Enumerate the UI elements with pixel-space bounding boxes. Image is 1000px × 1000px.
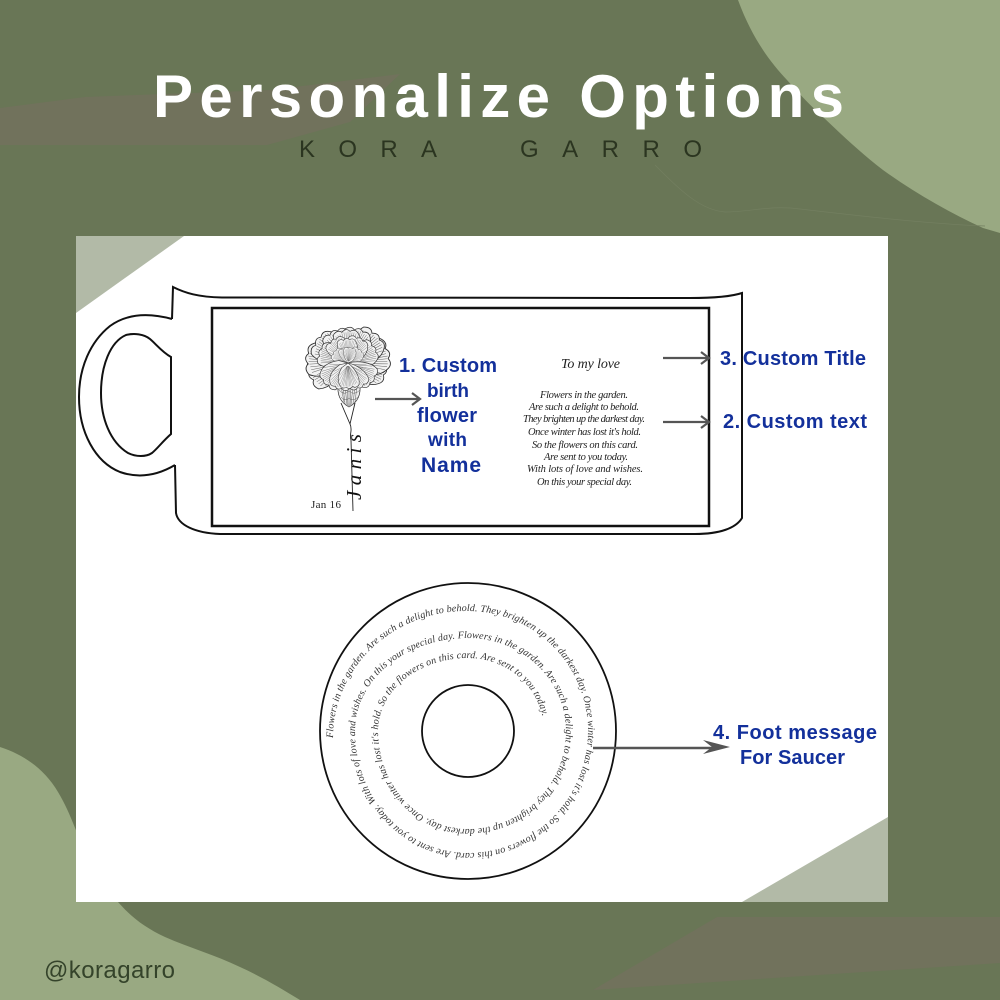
name on stem: Janis: [342, 434, 366, 500]
arrow: foot message: [593, 740, 730, 754]
custom poem text: Are sent to you today.: [543, 452, 628, 463]
thin contour line: [655, 165, 985, 226]
custom poem text: Are such a delight to behold.: [528, 402, 639, 413]
custom poem text: Flowers in the garden.: [539, 390, 628, 401]
spiral foot message: Flowers in the garden. Are such a delight to behold. They brighten up the darkest day. Once winter has lost it's hold. So the flowers on this card. Are sent to you today. With lots of love and wishes. On this your special day. Flowers in the garden. Are such a delight to behold. They brighten up the darkest day. Once winter has lost it's hold. So the flowers on this card. Are sent to you today.: [326, 604, 595, 860]
arrow: custom title: [663, 352, 709, 364]
wrap print area: [212, 308, 709, 526]
label: custom title: 3. Custom Title: [720, 348, 866, 370]
label: foot message: For Saucer: [740, 747, 845, 769]
flower stem: [341, 403, 355, 511]
mug outline: [79, 287, 742, 534]
brown shape bottom right: [593, 917, 1000, 990]
title: Personalize Options: [153, 63, 844, 130]
custom poem text: Once winter has lost it's hold.: [528, 427, 641, 438]
subtitle: KORA: [299, 136, 437, 163]
custom poem text: On this your special day.: [537, 477, 632, 488]
label: custom text: 2. Custom text: [723, 411, 867, 433]
light green shape top right: [738, 0, 1000, 233]
subtitle: GARRO: [520, 136, 702, 163]
label: custom birth flower: 1. Custom: [399, 355, 497, 377]
white panel: [76, 236, 888, 902]
corner triangle bottom right: [742, 817, 888, 902]
label: custom birth flower: flower: [417, 405, 477, 427]
label: foot message: [713, 722, 877, 769]
flower outer petals: [303, 323, 393, 391]
flower middle petals: [314, 333, 381, 375]
saucer outer rim: [320, 583, 616, 879]
mug handle inner: [101, 334, 171, 456]
label: custom birth flower: birth: [427, 381, 469, 402]
mug handle outer: [79, 315, 175, 476]
subtitle: [299, 136, 702, 163]
handle credit: @koragarro: [44, 957, 175, 984]
custom poem text: With lots of love and wishes.: [527, 464, 643, 475]
flower front petals: [316, 352, 381, 393]
icon: carnation birth flower: [303, 323, 393, 511]
arrow: custom text: [663, 416, 709, 428]
light green shape bottom left: [0, 747, 300, 1000]
birth date: Jan 16: [311, 499, 342, 511]
custom poem text: [523, 390, 645, 488]
flower calyx: [338, 383, 360, 407]
corner triangle top left: [76, 236, 184, 313]
saucer foot ring: [422, 685, 514, 777]
custom poem text: They brighten up the darkest day.: [523, 414, 645, 425]
saucer: [319, 582, 617, 880]
label: custom birth flower: Name: [421, 454, 481, 477]
label: foot message: 4. Foot message: [713, 722, 877, 744]
label: custom birth flower: with: [427, 430, 467, 451]
custom poem text: So the flowers on this card.: [532, 440, 638, 451]
custom title text: To my love: [561, 357, 620, 372]
label: custom birth flower: [399, 355, 497, 477]
arrow: flower: [375, 393, 420, 405]
brown shape top left: [0, 74, 400, 145]
